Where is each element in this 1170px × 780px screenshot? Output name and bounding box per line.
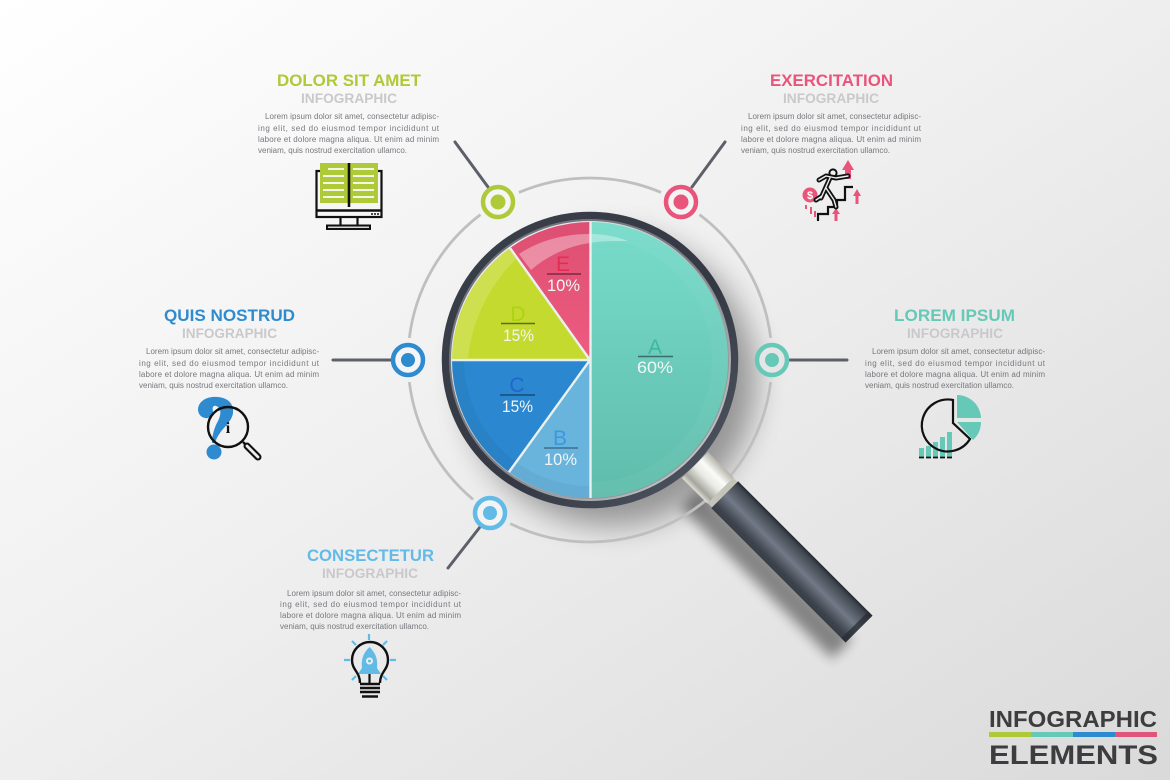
body text: labore et dolore magna aliqua. Ut enim ad minim	[280, 611, 461, 620]
panel: consectetur	[280, 547, 462, 696]
body text: ing elit, sed do eiusmod tempor incididunt ut	[865, 359, 1046, 368]
magnifier lens with pie chart	[446, 216, 734, 504]
subheading: INFOGRAPHIC	[301, 91, 397, 106]
label B	[544, 427, 578, 469]
connector: blue	[333, 358, 392, 362]
heading: EXERCITATION	[770, 72, 893, 90]
body text	[865, 347, 1046, 390]
slice D	[452, 248, 590, 360]
body text: ing elit, sed do eiusmod tempor incididunt ut	[741, 124, 922, 133]
lens rim	[446, 216, 734, 504]
body text: Lorem ipsum dolor sit amet, consectetur adipisc-	[872, 347, 1045, 356]
node: sky	[475, 498, 505, 528]
body text	[280, 589, 462, 631]
subheading: INFOGRAPHIC	[907, 326, 1003, 341]
body text: veniam, quis nostrud exercitation ullamco.	[280, 622, 429, 631]
glass highlights	[452, 222, 728, 498]
body text: Lorem ipsum dolor sit amet, consectetur adipisc-	[265, 112, 439, 121]
icon: question mark and magnifier: i	[226, 420, 231, 437]
body text: Lorem ipsum dolor sit amet, consectetur adipisc-	[748, 112, 921, 121]
magnifier shadow	[464, 234, 852, 659]
label C: C	[509, 374, 525, 397]
label B: B	[553, 427, 567, 450]
slice A	[590, 222, 728, 498]
logo line one: INFOGRAPHIC	[989, 706, 1157, 732]
body text: labore et dolore magna aliqua. Ut enim ad minim	[258, 135, 439, 144]
body text: veniam, quis nostrud exercitation ullamco.	[741, 146, 890, 155]
panel: quis nostrud	[139, 307, 320, 460]
body text: ing elit, sed do eiusmod tempor incididunt ut	[258, 124, 440, 133]
label B: 10%	[544, 450, 577, 469]
body text: Lorem ipsum dolor sit amet, consectetur adipisc-	[146, 347, 319, 356]
node: teal	[757, 345, 787, 375]
label A: 60%	[637, 358, 673, 377]
node: pink	[666, 187, 696, 217]
logo	[989, 706, 1158, 770]
icon: rocket light bulb	[344, 634, 396, 696]
heading: LOREM IPSUM	[894, 307, 1015, 325]
connector: green	[455, 142, 488, 187]
label E: E	[556, 253, 570, 276]
heading: DOLOR SIT AMET	[277, 72, 421, 90]
connector: teal	[788, 358, 847, 362]
node: green	[483, 187, 513, 217]
body text: veniam, quis nostrud exercitation ullamco.	[865, 381, 1014, 390]
icon: pie and bars	[919, 395, 981, 458]
label E: 10%	[547, 276, 580, 295]
body text: labore et dolore magna aliqua. Ut enim ad minim	[865, 370, 1045, 379]
label E	[547, 253, 581, 295]
body text: labore et dolore magna aliqua. Ut enim ad minim	[741, 135, 921, 144]
body text: Lorem ipsum dolor sit amet, consectetur adipisc-	[287, 589, 461, 598]
subheading: INFOGRAPHIC	[783, 91, 879, 106]
magnifier handle	[682, 452, 872, 642]
body text: ing elit, sed do eiusmod tempor incididunt ut	[139, 359, 320, 368]
connector: pink	[692, 142, 725, 187]
body text: veniam, quis nostrud exercitation ullamco.	[139, 381, 288, 390]
panel: lorem ipsum	[865, 307, 1046, 458]
body text	[741, 112, 922, 155]
icon: runner on stairs: $	[807, 190, 813, 202]
icon: question mark and magnifier	[198, 397, 258, 460]
label D: 15%	[503, 326, 534, 345]
connector: sky	[448, 527, 480, 568]
heading: CONSECTETUR	[307, 547, 434, 565]
logo line two: ELEMENTS	[989, 740, 1158, 770]
label C	[500, 374, 535, 416]
icon: book on monitor	[316, 163, 382, 229]
body text: labore et dolore magna aliqua. Ut enim ad minim	[139, 370, 319, 379]
panel: exercitation	[741, 72, 922, 221]
label D	[501, 303, 535, 345]
body text	[258, 112, 440, 155]
subheading: INFOGRAPHIC	[182, 326, 277, 341]
node: blue	[393, 345, 423, 375]
label A: A	[648, 336, 662, 359]
grip	[711, 481, 872, 642]
subheading: INFOGRAPHIC	[322, 566, 418, 581]
icon: runner on stairs	[802, 160, 861, 221]
panel: dolor sit amet	[258, 72, 440, 229]
body text	[139, 347, 320, 390]
body text: ing elit, sed do eiusmod tempor incididunt ut	[280, 600, 462, 609]
body text: veniam, quis nostrud exercitation ullamco.	[258, 146, 407, 155]
slice E	[510, 222, 590, 360]
collar	[682, 452, 734, 504]
label D: D	[510, 303, 526, 326]
label A	[637, 336, 673, 377]
heading: QUIS NOSTRUD	[164, 307, 295, 325]
orbit ring	[408, 178, 772, 542]
label C: 15%	[502, 397, 533, 416]
colour bar	[989, 732, 1157, 737]
slice B	[509, 360, 590, 498]
slice separators	[452, 222, 590, 498]
slice C	[452, 360, 590, 472]
